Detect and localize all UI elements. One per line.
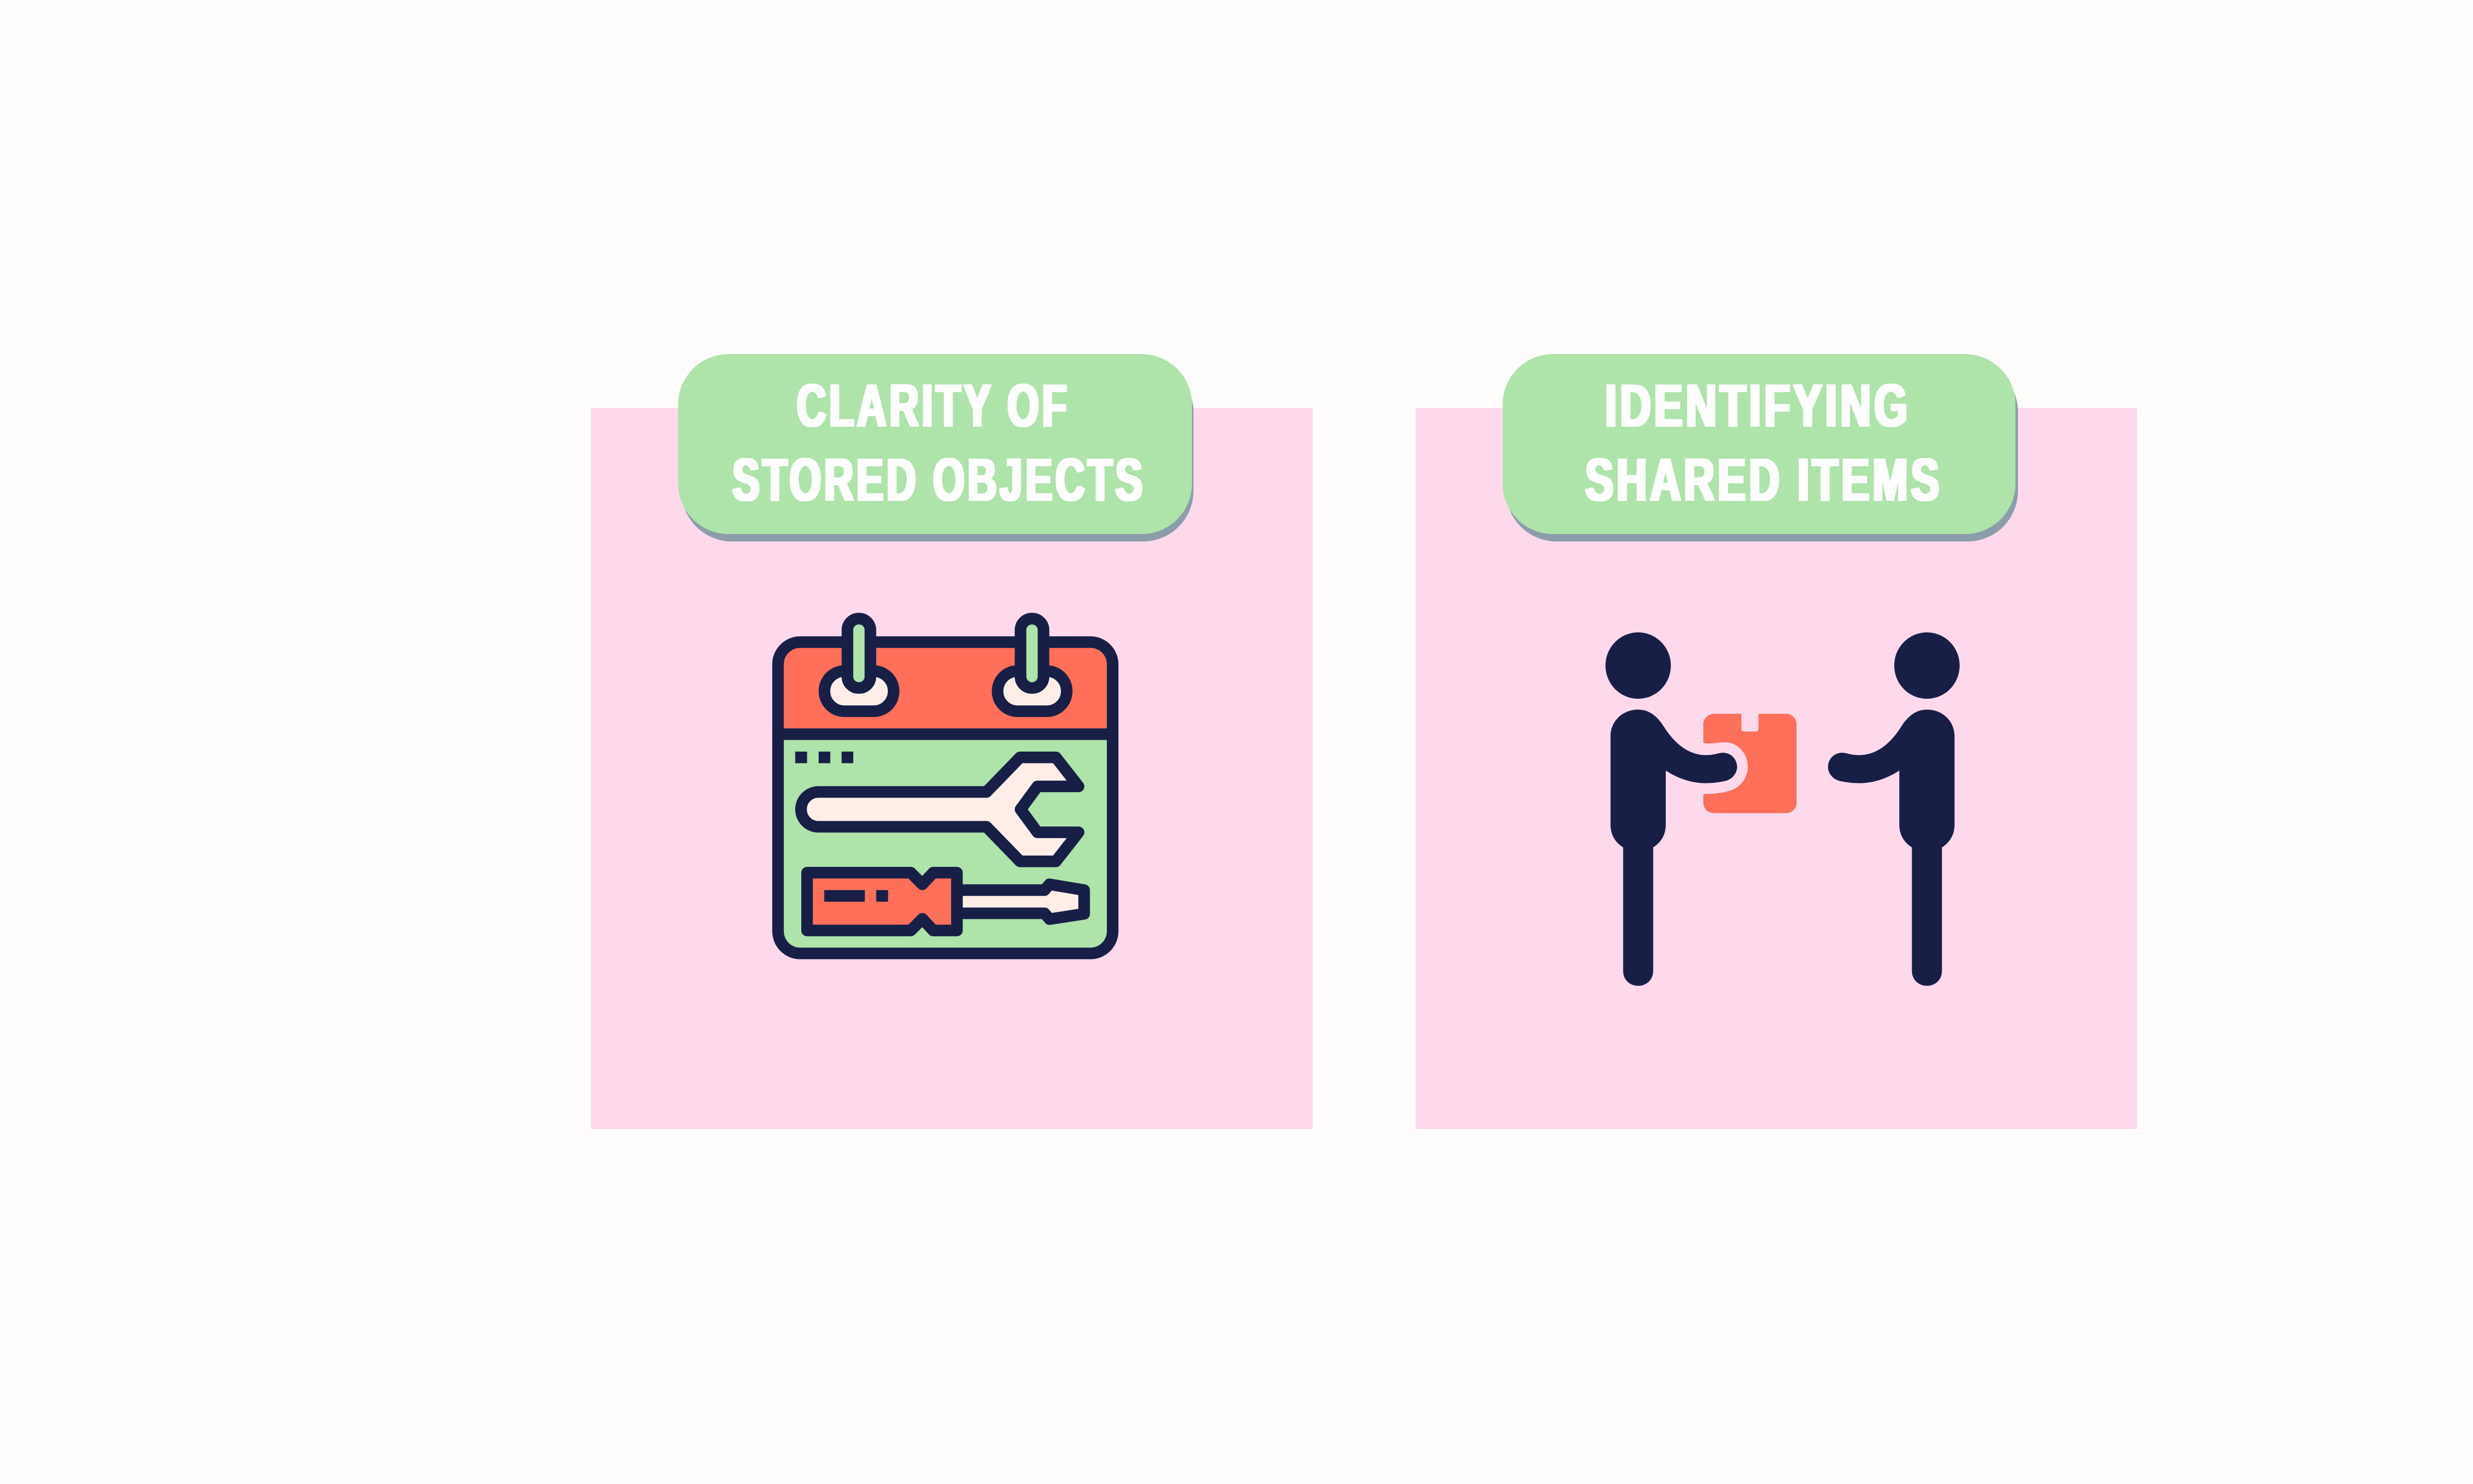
heading pill: clarity of stored objects bbox=[678, 354, 1193, 541]
icon: calendar with wrench and screwdriver bbox=[778, 619, 1113, 953]
panel: clarity of stored objects bbox=[591, 354, 1313, 1129]
heading pill: identifying shared items bbox=[1503, 354, 2018, 541]
heading text: identifying shared items: IDENTIFYING bbox=[1605, 372, 1911, 439]
icon part: right person bbox=[1828, 632, 1960, 986]
heading text: clarity of stored objects bbox=[733, 372, 1145, 513]
icon: two people exchanging a package bbox=[1605, 632, 1960, 986]
icon part: package bbox=[1703, 714, 1796, 813]
heading text: clarity of stored objects: CLARITY OF bbox=[797, 372, 1070, 439]
heading text: clarity of stored objects: STORED OBJECTS bbox=[733, 446, 1145, 513]
heading text: identifying shared items bbox=[1585, 372, 1942, 513]
panel: identifying shared items bbox=[1416, 354, 2137, 1129]
icon part: left person bbox=[1605, 632, 1737, 986]
heading text: identifying shared items: SHARED ITEMS bbox=[1585, 446, 1942, 513]
